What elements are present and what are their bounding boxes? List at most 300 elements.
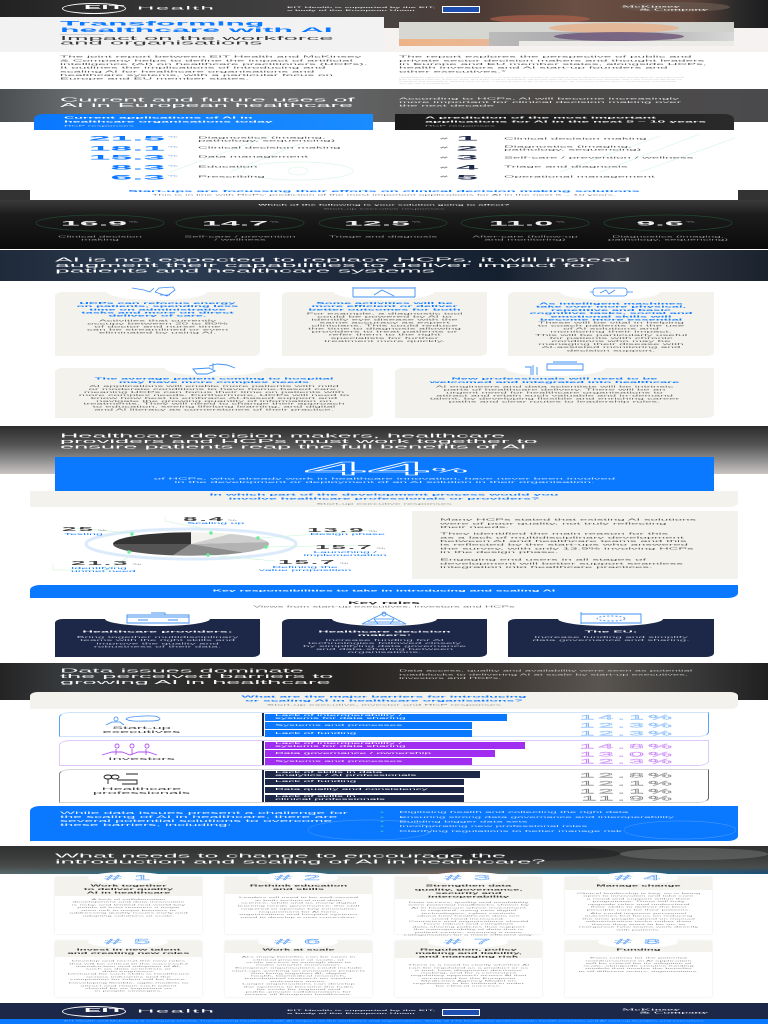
action card 5: introduction and adoption of AI, [76, 965, 181, 967]
header: prediction: A prediction of the most important [425, 116, 656, 119]
row: healthcare professionals: 12.1% [579, 779, 676, 786]
action card 3: Countries and organisations should [409, 920, 528, 922]
list: current applications: 6.3 [111, 173, 165, 180]
card: average patient: or moderate conditions to have home-based care, [89, 388, 339, 391]
action card 6: the systems to become the hubs [244, 986, 353, 988]
action card 3: is required, using new digital [420, 909, 517, 911]
row: investors: 12.3% [579, 757, 676, 765]
pie chart with labels: Identifying [71, 566, 127, 569]
McKinsey logo [622, 5, 708, 11]
source strip: EIT Health and McKinsey & Company (2020), Transforming healthcare with AI: Impact on the workforce and organisations. Study of 175 healthcare professionals, health investors and AI start-up founders and executives [64, 1020, 704, 1022]
action card 1: area risk in major barriers to [81, 909, 176, 911]
footer McKinsey [622, 1008, 708, 1014]
action card 7: accounted for the European [421, 977, 516, 979]
footer logo [62, 1006, 215, 1017]
card: new professionals: New professionals will need to be [451, 377, 657, 380]
text panel: HCP views: Engaging end users in all stages of [440, 558, 646, 561]
action card 8: models that involve the benefits [585, 967, 692, 969]
row: start-up executives: Lack of interoperability / [275, 714, 402, 717]
hero photo [399, 22, 734, 46]
text: # 1 [105, 873, 152, 881]
text panel: HCP views: development will better support seamless [440, 561, 683, 564]
card: refocus energy [55, 292, 260, 356]
card: average patient [55, 368, 373, 418]
card: the EU: data governance and sharing. [532, 639, 690, 641]
action card 5: such as data scientists or [86, 968, 171, 969]
action card 3 [395, 877, 542, 934]
card: average patient: treatments. They will need to change their approach [83, 403, 345, 405]
list: predicted applications: Operational management [504, 175, 655, 178]
text panel: HCP views: in the design phase. [440, 551, 559, 554]
McKinsey logo: & Company [640, 8, 708, 11]
text panel: HCP views: the survey, with only 13.9% involving HCPs [440, 547, 694, 550]
action card 2: Leaders will need to be well-versed [239, 896, 358, 898]
action card 2: Rethink education [250, 885, 347, 887]
band: current and future uses [0, 89, 768, 122]
key roles subheading: Views from start-up executives, investors and HCPs [253, 606, 515, 608]
action card 3: were potential roadblocks shown by [408, 904, 529, 906]
icon: monitor [352, 287, 416, 298]
intro text left: It outlines the implications of introducing and [60, 66, 326, 69]
action card 8: Even criteria for the potential [590, 957, 687, 958]
row: investors: Lack of interoperability / [275, 742, 402, 745]
title: Transforming [60, 20, 264, 27]
band: decision makers heading: ensure patients reap the full benefits of AI [60, 444, 527, 450]
card: healthcare providers: Bring together multidisciplinary [77, 636, 238, 638]
row: start-up executives: Start-up [112, 726, 171, 730]
card: more efficient: clinicians. This could reduce [311, 324, 458, 327]
action card 3: quality, governance, [415, 888, 522, 891]
text panel: HCP views: their needs. [440, 526, 509, 529]
row: investors: Investors [108, 756, 175, 760]
card: healthcare providers: Healthcare providers: [82, 630, 233, 633]
text panel: HCP views: is reflected by the start-ups who answered [440, 544, 688, 547]
text: # 4 [615, 873, 662, 881]
card: new professionals: talent, by developing flexible and enriching career [430, 397, 679, 400]
action card 6: across all European healthcare. [245, 994, 352, 996]
panel: potential solutions: these barriers, including: [60, 823, 232, 826]
band: AI augment heading: AI is not expected to replace HCPs, it will instead [55, 256, 631, 262]
title: healthcare with AI [60, 26, 333, 33]
text panel: HCP views [412, 511, 738, 579]
card: intelligent machines: AI-assisted monitoring and [542, 346, 680, 349]
list: current applications: 8.3 [111, 163, 165, 171]
stat values: 16.9 [61, 219, 127, 227]
icon: stethoscope [132, 286, 176, 296]
pie chart with labels: 25 % [62, 526, 107, 532]
header: current applications [34, 114, 373, 130]
action card 3: interoperability [428, 896, 509, 898]
list: predicted applications [440, 134, 693, 180]
text panel: HCP views: Many HCPs stated that existing AI solutions [440, 518, 696, 521]
row: start-up executives [59, 712, 709, 737]
card: average patient: AI applications will enable more patients with mild [89, 385, 339, 388]
card: new professionals [395, 368, 714, 418]
action card 3: used need increased. [432, 918, 505, 919]
action card 8: to all different actors, organisations. [578, 970, 699, 972]
pie chart with labels: 13.9 % [307, 527, 377, 533]
stat labels: making [81, 238, 119, 241]
rings [36, 214, 732, 232]
list: current applications: % [168, 174, 178, 176]
question: development process: involve healthcare professionals or providers? [229, 497, 539, 500]
card: more efficient: more efficient or deliver [312, 305, 457, 308]
card: average patient: meaning HCPs can focus their time on patients with [84, 391, 344, 394]
action card 7: There is a need to clarify whether AI [408, 964, 529, 966]
stat labels: Clinical decision [58, 235, 142, 238]
footer EU note [287, 1009, 435, 1014]
headline: start-ups: Start-ups are focussing their efforts on clinical decision making solutions [128, 189, 640, 192]
action card 4: Clinical leadership is key, as is being [577, 892, 700, 894]
row: start-up executives: 12.3% [579, 721, 676, 729]
footer logo: Health [137, 1008, 215, 1013]
footer EU note: a body of the European Union [287, 1012, 415, 1014]
panel: black stats band: % [556, 220, 565, 223]
row: investors: Data governance / ownership [275, 752, 431, 754]
card: intelligent machines [508, 292, 714, 356]
row: start-up executives: systems for data sharing [275, 717, 406, 720]
logo: EIT Health [62, 3, 215, 14]
card: more efficient: specialists for further [330, 336, 439, 339]
list: current applications: % [168, 145, 178, 148]
action card 7: Regulation, policy [420, 949, 517, 951]
list: current applications: Clinical decision making [198, 146, 341, 148]
list: predicted applications: Triage and diagnosis [504, 165, 628, 168]
list: current applications: Diagnostics (imaging, [198, 136, 326, 139]
card: decision makers: organisations. [348, 650, 421, 653]
list: current applications: % [168, 164, 178, 167]
action card 1: addressing quality issues early and [69, 912, 188, 914]
row: healthcare professionals: Healthcare [102, 787, 181, 791]
pie chart with labels: Scaling up [187, 522, 244, 525]
pie chart with labels [30, 511, 405, 579]
intro text right: in Europe and EU member states, alongside HCPs, [399, 62, 707, 65]
list: predicted applications: 2 [456, 144, 478, 151]
action card 2 [225, 877, 372, 934]
card: healthcare providers: robustness of their data. [94, 645, 221, 648]
card: decision makers: Increase funding for AI [325, 638, 444, 641]
footer flag [442, 1009, 480, 1016]
action card 6: public-private collaborations for [246, 991, 351, 993]
text: # 3 [445, 873, 492, 881]
card: more efficient: identify eye disease with the [311, 318, 458, 321]
row: healthcare professionals: clinical professionals [275, 798, 385, 801]
icon: stethoscope [104, 774, 138, 784]
title [60, 20, 333, 33]
text: # 2 [275, 873, 322, 881]
row: start-up executives: 14.1% [579, 713, 676, 721]
icon: hospital [126, 612, 190, 624]
action card 3: the interoperability of data that is [413, 929, 524, 930]
card: new professionals: attract and retain such valuable and in-demand [436, 394, 673, 397]
card: refocus energy: on patients, spending less [77, 305, 238, 308]
footnote: countries and specialties, giving a view on how AI is being used in the field. Refer to the full report for detailed survey methodology and findings [399, 80, 676, 81]
card: refocus energy: can be streamlined or even [87, 328, 228, 331]
footnote: and the list of contributors. [399, 82, 450, 83]
band: data issues: the perceived barriers to [60, 674, 333, 680]
action card 5: Demand for such skills is healthcare [68, 973, 189, 975]
row: healthcare professionals: professionals [93, 791, 190, 795]
EU support note: a body of the European Union [287, 9, 415, 11]
action card 8: will be critical for its adoption at [586, 962, 691, 964]
list: predicted applications: # [440, 156, 448, 158]
action card 4: a need and support within their [586, 898, 691, 900]
intro sentence: According to HCPs, AI will become increasingly [399, 97, 679, 100]
action card 4: administrative tasks rather than [586, 921, 691, 922]
pie chart with labels: 8.4 % [183, 516, 237, 522]
band: decision makers heading [0, 426, 768, 474]
footer EU note: EIT Health is supported by the EIT, [287, 1009, 435, 1012]
action card 5: attract and retain such talent [80, 984, 177, 986]
action card 2: in both technical and data [255, 899, 342, 901]
row: healthcare professionals: 12.1% [579, 787, 676, 794]
card: the EU: The EU: [585, 630, 637, 633]
card: refocus energy: eliminated by using AI. [99, 331, 216, 334]
action card 5: Develop and recruit the new roles [72, 960, 185, 962]
card: average patient: may have more complex needs [119, 381, 309, 384]
action card 2: science, while and as many digital [241, 902, 356, 904]
action card 8: scale, alongside creative funding [583, 965, 694, 966]
question: major barriers: Start-up executive, investor and HCP responses [267, 703, 501, 705]
pie chart with labels: unmet need [71, 570, 136, 572]
callout: 44%: of HCPs, who already work in healthcare innovation, have never been involved [154, 477, 615, 480]
action card 5: that will be critical to the successful [69, 962, 188, 964]
card: average patient: more complex needs. Furthermore, HCPs will need to [79, 394, 349, 396]
action card 7: regulatory approach across AI that [410, 974, 527, 976]
card: average patient: to education, seeing lifelong learning, and digital [93, 406, 335, 408]
bullet list: • Clarifying regulations to better manage risk [380, 830, 622, 832]
panel: potential solutions: the scaling of AI in healthcare, there are [60, 815, 337, 818]
text panel: HCP views: integration into healthcare practices. [440, 565, 653, 568]
action card 6: start-ups working on innovative projects [232, 970, 365, 972]
pie chart with labels: Testing [64, 532, 103, 535]
action card 3: have robust and compliant [424, 923, 513, 925]
card: intelligent machines: for patients with chronic [549, 337, 673, 339]
text: # 8 [615, 937, 662, 945]
footer McKinsey: McKinsey [622, 1008, 680, 1011]
card: refocus energy: Activities that currently [99, 319, 216, 322]
card: intelligent machines: decision support. [567, 349, 655, 352]
action card 5: across industries and the [86, 976, 171, 978]
action card 6: for scale for regional and [257, 988, 340, 990]
card: more efficient: Some activities will be [316, 302, 453, 305]
band: data issues: Data access, quality and availability were seen as potential [399, 669, 692, 672]
logo: EIT Health: EIT [84, 4, 124, 10]
action card 1: Work together [90, 885, 167, 887]
row: healthcare professionals: Lack of skills in data [275, 771, 382, 774]
card: intelligent machines: managing their disease with [538, 343, 684, 346]
action card 5 [55, 941, 202, 997]
card: intelligent machines: repetitive and basic [551, 309, 671, 311]
header: current applications: Current applications of AI in [64, 116, 253, 119]
card: decision makers: makers: [358, 634, 411, 637]
list: current applications: 18.1 [89, 144, 165, 151]
intro text left: Europe and EU member states. [60, 77, 249, 80]
decorative rings [308, 820, 736, 840]
bar: key responsibilities [30, 585, 738, 598]
action card 3: Data access, quality and availability [408, 901, 529, 903]
action card 5: data engineers. [102, 970, 155, 972]
row: investors: Systems and processes [275, 760, 402, 762]
row: healthcare professionals: Lack of funding [275, 780, 356, 783]
card: more efficient: treatment more quickly. [324, 339, 445, 342]
action card 1: AI in healthcare [87, 892, 170, 894]
action card 6: make smarter innovation. [256, 964, 341, 965]
card: refocus energy: delivery of care. [108, 314, 207, 317]
action card 6: scale access to enough data to [246, 961, 351, 963]
heading: Current and future uses of [60, 96, 355, 102]
card: new professionals: AI engineers and data scientists will be intrinsic [436, 385, 673, 388]
action card 3: Strengthen data [426, 885, 511, 887]
callout: 44%: in the development or deployment of an AI solution in their organisation. [174, 481, 595, 484]
list: current applications: % [168, 154, 178, 157]
card: refocus energy: occupy between 20 to 80% [87, 322, 228, 325]
action card 7: and managing risk [419, 956, 518, 958]
card: intelligent machines: conditions who may be [551, 340, 671, 343]
panel: black stats band [0, 200, 768, 249]
action card 4 [565, 877, 712, 934]
list: current applications: Data management [198, 155, 308, 158]
band: decision makers heading: providers and HCPs must work together to [60, 438, 538, 444]
text panel: HCP views: They identified the main reason for this [440, 532, 668, 535]
question: development process: Start-up executive responses [316, 502, 452, 504]
header photo right [384, 28, 768, 52]
card: more efficient: better outcomes for both [308, 308, 461, 311]
action card 4: outcomes but focus on reducing [584, 915, 692, 917]
action card 4: those they want to be on, to [592, 924, 685, 925]
card: decision makers: and data-sharing between [316, 648, 453, 650]
action card 5: competition for talent will be fierce. [70, 978, 187, 980]
card: more efficient: same accuracy as expert [319, 321, 450, 324]
list: current applications [89, 134, 341, 180]
list: predicted applications: 1 [456, 134, 478, 142]
card: new professionals: paths and clear routes to leadership roles. [449, 400, 660, 403]
action card 8: reimbursement in AI application [585, 959, 692, 961]
question: major barriers [30, 692, 738, 709]
panel: black stats band: After-care (follow-up [472, 235, 578, 238]
card: the EU: Increase funding and simplify [534, 636, 688, 638]
band: what needs to change [0, 846, 768, 874]
action card 2: required to operate key innovation [241, 908, 356, 909]
bullet list [380, 811, 674, 832]
header: prediction [395, 114, 734, 130]
intro text left: intelligence (AI) on healthcare practitioners (HCPs). [60, 62, 368, 65]
list: predicted applications: Diagnostics (imaging, [504, 145, 632, 148]
card: average patient: and AI literacy as cornerstones of their practice. [94, 409, 334, 411]
panel: black stats band: pathology, sequencing) [608, 238, 728, 241]
row: healthcare professionals: Data quality and consistency [275, 788, 428, 791]
card: healthcare providers: improve the quality and [96, 642, 219, 644]
action card 2: requirement for AI here, [258, 910, 339, 912]
card: intelligent machines: cognitive tasks, social and [529, 312, 693, 315]
heading [60, 96, 355, 108]
action card 2: need to develop a new curriculum. [240, 916, 357, 918]
action card 1: points of trust remains a major [77, 906, 180, 908]
action card 7: making, and for a consistent [421, 972, 516, 973]
list: current applications: 21.5 [89, 134, 165, 142]
card: more efficient: For example, a diagnostic tool [306, 312, 463, 315]
list: predicted applications: 4 [456, 163, 478, 171]
action card 1: to deliver quality [84, 888, 173, 891]
EU support note: EIT Health is supported by the EIT, [287, 6, 435, 8]
list: predicted applications: 3 [456, 153, 478, 161]
icon: heart monitor [590, 288, 633, 296]
list: current applications: pathology, sequencing) [198, 139, 335, 142]
card: decision makers: technologies followed closely [308, 642, 461, 644]
pie chart with labels: 15.7 % [278, 559, 348, 565]
list: predicted applications: Self-care / prevention / wellness [504, 156, 693, 158]
panel: potential solutions: several potential solutions to overcome [60, 819, 332, 822]
list: predicted applications: pathology, sequencing) [504, 148, 641, 151]
panel: black stats band: Start-up executive responses [323, 208, 445, 210]
action card 6: outcomes areas. [270, 980, 327, 982]
action card 3: technologies, cyber controls [421, 912, 516, 914]
header: current applications: HCP responses [64, 125, 134, 127]
action card 4: the time people spend on manual [582, 918, 695, 920]
key roles heading: Key roles [348, 601, 420, 604]
action card 6: Work at scale [262, 949, 335, 951]
card: intelligent machines: monitoring their impact. [550, 330, 672, 333]
bullet list: • Incorporating new professional roles [380, 825, 587, 828]
action card 6: European organisations could include [235, 967, 362, 969]
pie chart with labels: Design phase [310, 533, 385, 536]
action card 7: regulations to be tailored in order [413, 982, 524, 984]
action card 7: Medicines Agency Model on [421, 980, 516, 981]
question: Which of the following is your solution going to affect? [258, 204, 510, 206]
pie chart with labels: Defining the [272, 566, 338, 568]
action card 5: Invest in new talent [77, 949, 180, 951]
icon: EU flag [580, 612, 642, 624]
band: AI augment heading [0, 250, 768, 281]
panel: black stats band: and monitoring) [484, 238, 566, 241]
card: intelligent machines: emotional skills will [551, 315, 671, 318]
action card 3: about how healthcare data are [417, 915, 520, 916]
action card 2: organisations and hospital systems [239, 913, 358, 915]
intro text right [399, 55, 707, 84]
action card 1: adapting solutions at scale. [83, 914, 174, 916]
card: average patient: know how best to embrace AI-based support and [91, 397, 337, 399]
question: development process [30, 491, 738, 507]
row: start-up executives: 12.3% [579, 729, 676, 736]
header: prediction: applications for AI in the next 5 – 10 years [425, 120, 706, 123]
card: more efficient: refer them to the right [328, 333, 441, 336]
text: # 6 [275, 937, 322, 945]
panel: potential solutions [30, 806, 738, 841]
panel: black stats band: 12.5 [344, 219, 410, 227]
action card 6: health, biomedical research, [251, 975, 346, 977]
text panel: HCP views: between AI and healthcare teams and this [440, 540, 687, 543]
action card 5: in people strategies. [94, 990, 163, 991]
action card 3: AI in healthcare where investment [411, 906, 526, 908]
row: investors: 14.8% [579, 742, 676, 750]
list: current applications: % [168, 136, 178, 138]
band: data issues [0, 663, 768, 700]
band: AI augment heading: patients and healthcare systems [55, 268, 435, 273]
header: prediction: HCP responses [425, 125, 495, 127]
card: healthcare providers [55, 619, 260, 657]
card: more efficient: the time to diagnosis allowing [308, 327, 461, 330]
action card 2: and skills [273, 888, 324, 891]
intro sentence [399, 97, 681, 107]
panel: black stats band: % [270, 220, 279, 223]
header: current applications: healthcare organisations today [64, 120, 273, 123]
icon: data team [525, 362, 584, 375]
intro text right: other executives.* [399, 70, 506, 73]
heading: AI in European healthcare [60, 102, 353, 108]
text: # 7 [445, 937, 492, 945]
action card 4: possible care for their patients. [587, 909, 690, 911]
footer logo: EIT [84, 1008, 124, 1013]
